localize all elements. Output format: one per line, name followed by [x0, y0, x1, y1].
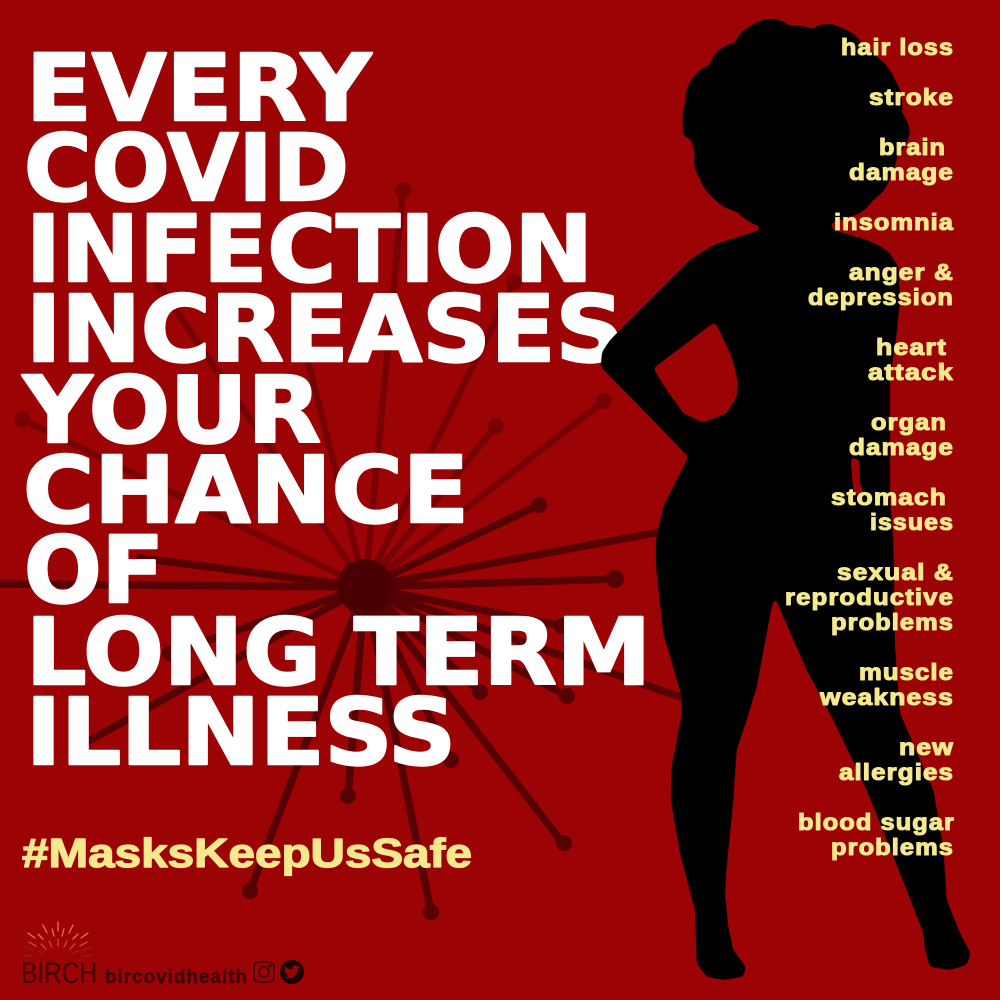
- label: anger and depression: anger &: [849, 259, 954, 285]
- label: muscle weakness: weakness: [819, 684, 954, 710]
- label: sexual and reproductive problems: reproductive: [785, 584, 954, 610]
- headline line 6: CHANCE: [23, 437, 469, 544]
- label: organ damage: organ: [871, 409, 947, 435]
- label: anger and depression: [808, 259, 954, 310]
- headline line 3: INFECTION: [26, 196, 593, 303]
- hashtag: #MasksKeepUsSafe: [22, 830, 472, 876]
- label: sexual and reproductive problems: problems: [831, 609, 954, 635]
- headline line 4: INCREASES: [26, 276, 624, 383]
- BIRCH logo sunburst: [24, 922, 92, 956]
- label: muscle weakness: [819, 659, 954, 710]
- BIRCH wordmark: BIRCH: [21, 957, 97, 990]
- headline: [22, 35, 651, 786]
- label: sexual and reproductive problems: [785, 559, 954, 635]
- label: insomnia: insomnia: [834, 209, 954, 235]
- label: new allergies: allergies: [839, 759, 954, 785]
- label: new allergies: new: [899, 734, 954, 760]
- label: stomach issues: [831, 484, 954, 535]
- label: heart attack: [868, 334, 954, 385]
- label: sexual and reproductive problems: sexual &: [837, 559, 954, 585]
- symptom labels: [785, 34, 955, 860]
- label: brain damage: damage: [849, 159, 954, 185]
- icon: twitter: [280, 960, 304, 984]
- virus burst graphic: [0, 182, 683, 920]
- label: blood sugar problems: blood sugar: [798, 809, 955, 835]
- label: stomach issues: issues: [870, 509, 954, 535]
- handle: bircovidhealth: [105, 967, 247, 988]
- headline line 7: OF: [24, 517, 164, 624]
- headline line 8: LONG TERM: [26, 599, 651, 706]
- headline line 5: YOUR: [22, 357, 321, 464]
- label: muscle weakness: muscle: [859, 659, 954, 685]
- label: heart attack: attack: [868, 359, 954, 385]
- label: anger and depression: depression: [808, 284, 954, 310]
- label: organ damage: damage: [849, 434, 954, 460]
- icon: instagram: [254, 962, 274, 982]
- label: new allergies: [839, 734, 954, 785]
- label: stomach issues: stomach: [831, 484, 947, 510]
- label: blood sugar problems: problems: [831, 834, 954, 860]
- label: brain damage: [849, 134, 954, 185]
- headline line 9: ILLNESS: [26, 679, 456, 786]
- headline line 2: COVID: [24, 115, 349, 222]
- label: brain damage: brain: [879, 134, 946, 160]
- label: hair loss: hair loss: [841, 34, 954, 60]
- label: stroke: stroke: [869, 84, 954, 110]
- woman silhouette: [601, 19, 971, 980]
- label: organ damage: [849, 409, 954, 460]
- headline line 1: EVERY: [26, 35, 372, 142]
- label: heart attack: heart: [876, 334, 947, 360]
- label: blood sugar problems: [798, 809, 955, 860]
